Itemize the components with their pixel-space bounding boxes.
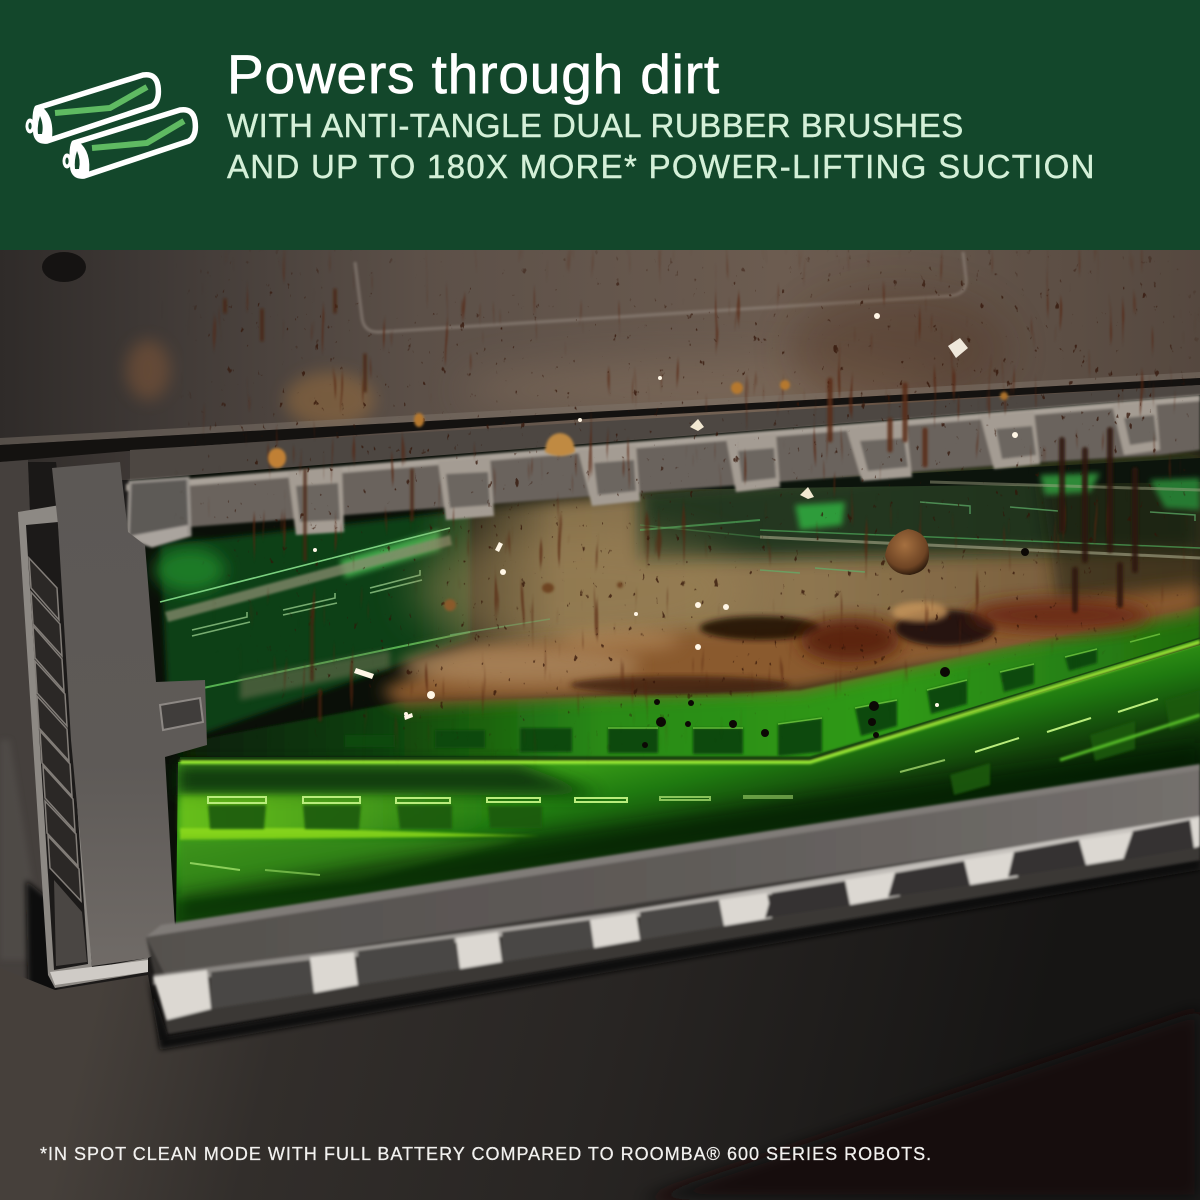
lower roller upper half xyxy=(170,606,1200,757)
falling dirt streaks xyxy=(188,250,1198,750)
lower comb bar xyxy=(146,764,1200,1034)
left end cap xyxy=(0,460,207,1002)
upper comb bar xyxy=(126,395,1200,547)
subtitle xyxy=(226,107,1096,185)
footnote: *IN SPOT CLEAN MODE WITH FULL BATTERY COMPARED TO ROOMBA® 600 SERIES ROBOTS. xyxy=(40,1144,932,1164)
header band xyxy=(0,0,1200,250)
lower roller lower half xyxy=(176,645,1200,925)
subtitle: WITH ANTI-TANGLE DUAL RUBBER BRUSHES xyxy=(227,107,964,144)
brush chamber with green rollers xyxy=(130,395,1200,930)
dirt particles xyxy=(268,313,1029,748)
product scene: roller brush chamber xyxy=(0,250,1200,1200)
icon: two batteries xyxy=(26,72,198,179)
title: Powers through dirt xyxy=(227,43,720,105)
subtitle: AND UP TO 180X MORE* POWER-LIFTING SUCTION xyxy=(227,148,1096,185)
lower housing floor xyxy=(0,858,1200,1200)
upper roller xyxy=(160,510,470,745)
dirt cloud xyxy=(380,530,1200,706)
upper housing panel xyxy=(0,250,1200,484)
